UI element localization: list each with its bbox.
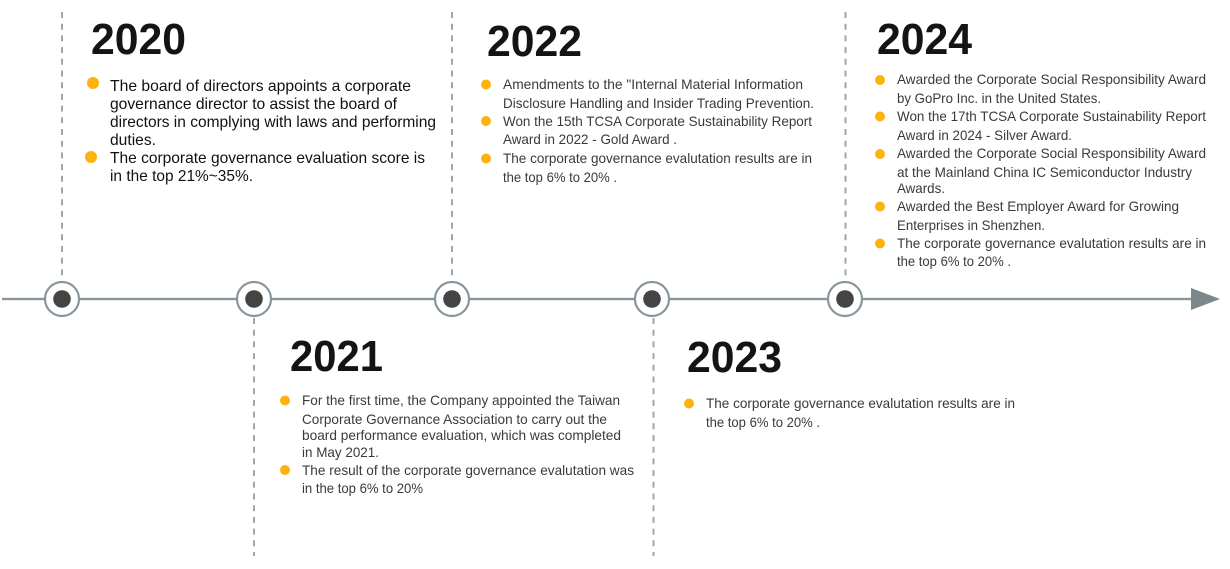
heading: 2024: 2024 [877, 15, 973, 64]
bullet: evaluation results [684, 395, 1015, 430]
heading: 2023: 2023 [687, 333, 782, 382]
bullet: appoints governance director: duties. [110, 132, 156, 149]
bullet: amendments [481, 76, 814, 111]
bullet: amendments: Disclosure Handling and Insider Trading Prevention. [503, 95, 814, 111]
bullet: evaluation result [280, 462, 634, 496]
bullet: appoints governance director: The board of directors appoints a corporate [110, 78, 411, 95]
panel: 2023 [684, 333, 1015, 430]
bullet: IC semiconductor award: Awarded the Corporate Social Responsibility Award [897, 145, 1206, 161]
bullet: evaluation result: The result of the corporate governance evalutation was [302, 462, 634, 478]
panel: 2024 [875, 15, 1206, 269]
timeline node: 2024 [828, 282, 862, 316]
bullet: evaluation results: the top 6% to 20% . [706, 414, 820, 430]
bullet: TCSA gold award: Award in 2022 - Gold Award . [503, 131, 677, 147]
bullet: board performance evaluation: Corporate Governance Association to carry out the [302, 411, 607, 427]
bullet: IC semiconductor award: at the Mainland China IC Semiconductor Industry [897, 164, 1192, 180]
bullet: GoPro award [875, 71, 1206, 106]
timeline arrow [2, 288, 1220, 310]
bullet: evaluation result: in the top 6% to 20% [302, 480, 423, 496]
bullet: TCSA gold award: Won the 15th TCSA Corporate Sustainability Report [503, 113, 812, 129]
bullet: evaluation results [481, 150, 812, 185]
bullet: evaluation results: the top 6% to 20% . [503, 169, 617, 185]
bullet: appoints governance director: directors in complying with laws and performing [110, 114, 436, 131]
bullet: GoPro award: by GoPro Inc. in the United States. [897, 90, 1101, 106]
panel: 2022 [481, 17, 814, 185]
bullet: TCSA silver award: Won the 17th TCSA Corporate Sustainability Report [897, 108, 1206, 124]
panel: 2020 [85, 15, 436, 185]
bullet: board performance evaluation: For the first time, the Company appointed the Taiwan [302, 392, 620, 408]
bullet: board performance evaluation [280, 392, 621, 460]
bullet: amendments: Amendments to the "Internal Material Information [503, 76, 803, 92]
heading: 2020: 2020 [91, 15, 186, 64]
bullet: evaluation results [875, 235, 1206, 269]
bullet: evaluation score [85, 150, 425, 185]
bullet: evaluation results: The corporate governance evalutation results are in [897, 235, 1206, 251]
bullet: TCSA gold award [481, 113, 812, 147]
timeline node: 2022 [435, 282, 469, 316]
bullet: evaluation score: in the top 21%~35%. [110, 168, 253, 185]
bullet: board performance evaluation: in May 2021. [302, 444, 379, 460]
timeline node: 2021 [237, 282, 271, 316]
panel: 2021 [280, 332, 634, 496]
bullet: best employer award [875, 198, 1179, 233]
bullet: best employer award: Awarded the Best Employer Award for Growing [897, 198, 1179, 214]
heading: 2021: 2021 [290, 332, 383, 381]
bullet: board performance evaluation: board performance evaluation, which was completed [302, 427, 621, 443]
bullet: evaluation results: the top 6% to 20% . [897, 253, 1011, 269]
heading: 2022: 2022 [487, 17, 582, 66]
bullet: evaluation results: The corporate governance evalutation results are in [706, 395, 1015, 411]
bullet: evaluation results: The corporate governance evalutation results are in [503, 150, 812, 166]
bullet: evaluation score: The corporate governance evaluation score is [110, 150, 425, 167]
bullet: TCSA silver award: Award in 2024 - Silver Award. [897, 127, 1072, 143]
bullet: IC semiconductor award: Awards. [897, 180, 945, 196]
bullet: GoPro award: Awarded the Corporate Social Responsibility Award [897, 71, 1206, 87]
timeline node: 2023 [635, 282, 669, 316]
bullet: appoints governance director: governance director to assist the board of [110, 96, 398, 113]
bullet: best employer award: Enterprises in Shenzhen. [897, 217, 1045, 233]
bullet: appoints governance director [87, 77, 436, 149]
bullet: TCSA silver award [875, 108, 1206, 143]
timeline node: 2020 [45, 282, 79, 316]
bullet: IC semiconductor award [875, 145, 1206, 196]
